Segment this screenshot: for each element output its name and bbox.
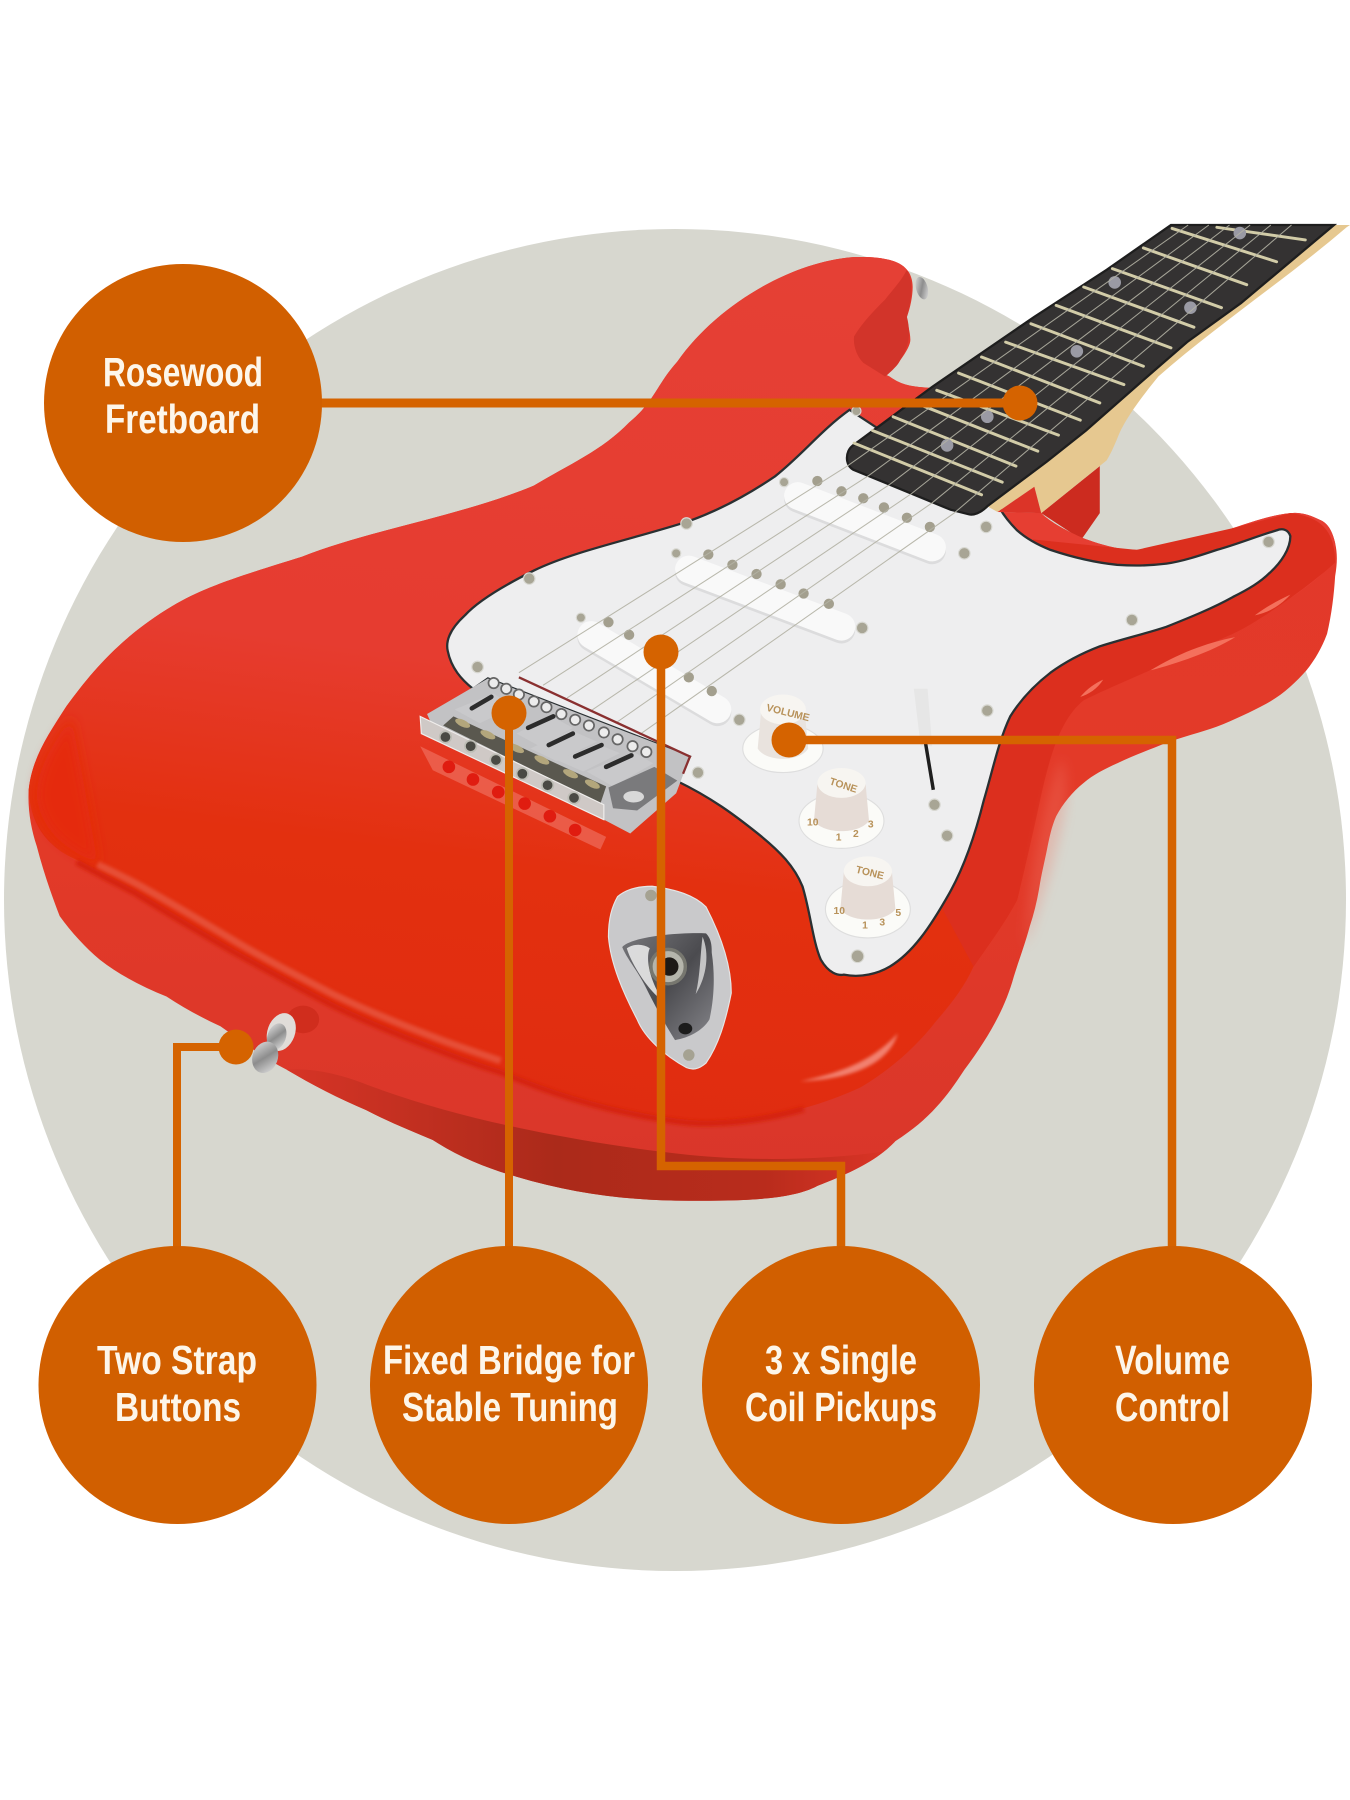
tone knob 2: TONE — [855, 865, 885, 882]
tone knob 1 — [799, 768, 884, 848]
red reflection spot — [287, 1006, 319, 1033]
front edge light band — [98, 864, 501, 1061]
middle pickup — [689, 549, 841, 630]
jack plate screw top — [645, 890, 657, 901]
volume knob — [743, 695, 823, 773]
guitar body side — [28, 257, 1337, 1201]
tone knob 2: 1 — [862, 921, 868, 932]
dot: bridge — [492, 696, 526, 730]
selector switch — [914, 689, 933, 790]
right top-face tint — [918, 513, 1335, 967]
callout: volume control — [1034, 1246, 1312, 1524]
leader: strap buttons — [177, 1030, 254, 1250]
bridge pickup — [591, 617, 718, 712]
front edge dark line — [77, 862, 804, 1123]
jack socket — [651, 949, 685, 984]
dot: volume — [772, 722, 806, 758]
tone knob 2: 5 — [895, 908, 901, 919]
glossy highlight: shoulder streak small — [1080, 680, 1103, 697]
left corner bright area — [37, 718, 98, 863]
callout: two strap buttons: Buttons — [115, 1384, 241, 1430]
body shadow behind neck — [1041, 466, 1100, 540]
callout: two strap buttons — [38, 1246, 316, 1524]
bridge screws — [440, 731, 580, 804]
dot: fretboard — [1002, 386, 1038, 420]
callout: single coil pickups: 3 x Single — [765, 1337, 917, 1383]
jack chrome cup — [622, 933, 714, 1040]
guitar body front face — [29, 257, 1335, 1121]
callout: single coil pickups: Coil Pickups — [745, 1384, 937, 1430]
guitar body underside shadow — [287, 1069, 884, 1201]
jack hole — [660, 957, 678, 976]
glossy highlight: lower right — [800, 1033, 898, 1081]
strings — [519, 225, 1292, 735]
neck maple edge — [987, 225, 1350, 513]
pickguard — [447, 406, 1290, 976]
neck heel wedge — [998, 487, 1041, 513]
callout: volume control: Control — [1115, 1384, 1230, 1430]
callout: rosewood fretboard — [44, 264, 322, 542]
bridge plate — [427, 678, 690, 833]
bridge — [420, 677, 690, 850]
jack reflection left — [627, 945, 664, 1001]
bridge end hole — [623, 791, 644, 802]
tone knob 1: 2 — [853, 829, 859, 840]
callout: rosewood fretboard: Rosewood — [103, 349, 263, 395]
horn cutaway side — [854, 270, 911, 377]
strap button stem — [263, 1021, 290, 1053]
tone knob 1: 3 — [868, 820, 874, 831]
frets — [854, 227, 1305, 495]
side glow at waist — [1024, 758, 1067, 947]
fretboard wood — [847, 225, 1334, 515]
bridge reflection — [420, 746, 606, 850]
tone knob 1: 10 — [807, 817, 819, 828]
neck pickup — [798, 476, 935, 550]
output jack plate — [608, 886, 731, 1069]
dot: strap button — [218, 1030, 254, 1064]
bridge springs — [454, 717, 601, 791]
callout: fixed bridge: Stable Tuning — [402, 1384, 618, 1430]
small hole — [678, 1023, 692, 1034]
pickguard plate — [447, 410, 1290, 976]
strap button head — [248, 1038, 283, 1077]
glossy highlight: shoulder streak wide — [1150, 637, 1235, 670]
background circle — [4, 229, 1346, 1571]
callout: volume control: Volume — [1115, 1337, 1230, 1383]
saddle slots — [472, 697, 631, 767]
tone knob 2 — [825, 856, 910, 938]
jack reflection right — [696, 937, 706, 994]
jack plate screw bottom — [683, 1049, 695, 1061]
callout: single coil pickups — [702, 1246, 980, 1524]
callout: two strap buttons: Two Strap — [97, 1337, 257, 1383]
bridge slot edge — [519, 677, 690, 774]
leader: rosewood fretboard — [320, 386, 1038, 420]
callout: fixed bridge: Fixed Bridge for — [383, 1337, 635, 1383]
fret markers — [941, 227, 1246, 452]
fretboard — [847, 225, 1334, 515]
leader: volume — [772, 722, 1172, 1250]
bridge end block — [608, 767, 677, 810]
saddle adjusters — [488, 678, 651, 757]
callout: fixed bridge — [370, 1246, 648, 1524]
pickguard screws — [472, 406, 1274, 963]
tone knob 2: 3 — [879, 917, 885, 928]
tone knob 1: TONE — [828, 776, 859, 796]
callout: rosewood fretboard: Fretboard — [105, 396, 260, 442]
dot: pickups — [644, 634, 678, 670]
jack plate outer — [608, 886, 731, 1069]
volume knob: VOLUME — [765, 703, 811, 724]
leader: pickups — [644, 634, 841, 1250]
leader: bridge — [492, 696, 526, 1250]
bridge front rail — [420, 716, 604, 820]
strap button — [248, 1006, 319, 1077]
glossy highlight: shoulder streak thin — [1255, 595, 1290, 615]
strap button washer — [262, 1009, 301, 1055]
bridge spring band — [443, 716, 606, 804]
strap peg at upper horn — [913, 276, 930, 301]
bridge saddles — [455, 693, 653, 786]
tone knob 1: 1 — [836, 832, 842, 843]
electric guitar illustration — [28, 225, 1350, 1201]
tone knob 2: 10 — [833, 906, 845, 917]
